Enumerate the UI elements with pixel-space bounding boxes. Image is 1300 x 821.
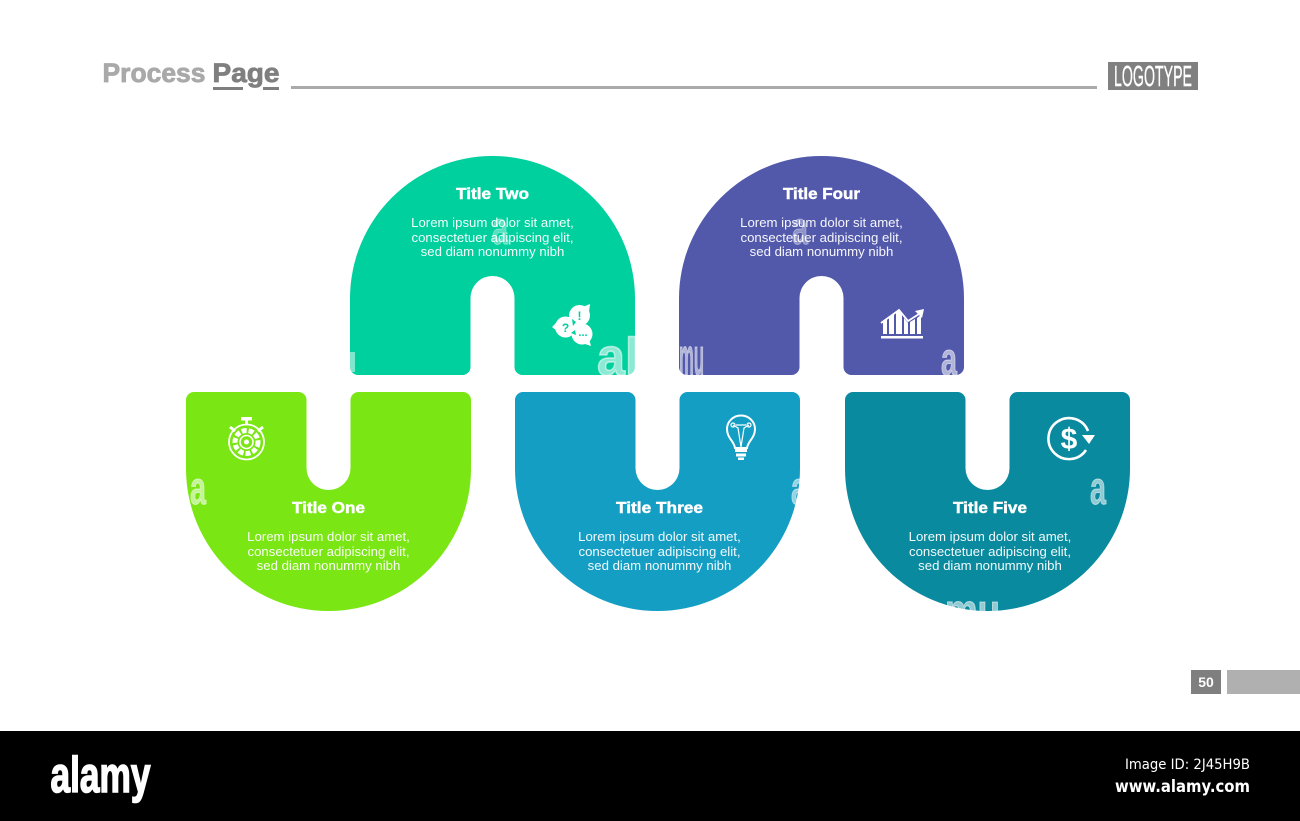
image id: Image ID: 2J45H9B — [1125, 757, 1250, 773]
panel: title five — [845, 392, 1130, 633]
text block: Lorem ipsum dolor sit amet, — [411, 215, 574, 230]
footer url: www.alamy.com — [1115, 777, 1250, 796]
text block: consectetuer adipiscing elit, — [578, 544, 741, 559]
watermark fragments — [945, 462, 1106, 633]
logotype badge — [1108, 61, 1198, 93]
heading: Title Five — [953, 500, 1027, 517]
text block: consectetuer adipiscing elit, — [740, 230, 903, 245]
watermark fragments: mu — [945, 586, 1000, 633]
heading: Title Three — [616, 500, 703, 517]
icon: speech bubbles: ? — [562, 321, 569, 335]
icon: dollar cycle: $ — [1061, 423, 1078, 456]
panel: title two — [350, 156, 639, 387]
icon: speech bubbles: ... — [578, 327, 588, 339]
heading: Title One — [292, 500, 365, 517]
text block: consectetuer adipiscing elit, — [247, 544, 410, 559]
icon: light bulb — [727, 416, 755, 460]
page number: 50 — [1198, 674, 1214, 690]
panel: title four — [679, 156, 964, 387]
text block: Lorem ipsum dolor sit amet, — [909, 529, 1071, 544]
heading: Title Two — [456, 186, 529, 203]
text block: Lorem ipsum dolor sit amet, — [578, 529, 741, 544]
header title: Process — [102, 58, 206, 88]
watermark fragments — [350, 202, 639, 387]
text block: consectetuer adipiscing elit, — [411, 230, 574, 245]
watermark fragments: al — [597, 328, 639, 387]
header title: Page — [212, 58, 280, 88]
heading: Title Four — [783, 186, 860, 203]
text block: sed diam nonummy nibh — [257, 558, 400, 573]
watermark fragment: a — [791, 462, 807, 514]
watermark fragment: a — [190, 462, 206, 514]
header title — [102, 58, 280, 90]
icon: speech bubbles — [552, 304, 592, 346]
logotype badge: LOGOTYPE — [1114, 61, 1192, 93]
icon: dollar cycle — [1048, 418, 1095, 459]
text block: Lorem ipsum dolor sit amet, — [247, 529, 410, 544]
icon: speech bubbles: ! — [578, 309, 582, 323]
watermark fragments — [679, 202, 957, 387]
watermark fragments: a — [792, 202, 808, 254]
watermark fragments: a — [492, 202, 508, 254]
text block: sed diam nonummy nibh — [421, 244, 564, 259]
text block: consectetuer adipiscing elit, — [909, 544, 1071, 559]
text block: sed diam nonummy nibh — [588, 558, 731, 573]
watermark fragments: mu — [679, 328, 704, 387]
watermark fragments: a — [1090, 462, 1106, 514]
icon: stopwatch gear — [229, 417, 264, 460]
panel: title one — [186, 392, 471, 611]
text block: sed diam nonummy nibh — [918, 558, 1062, 573]
text block: sed diam nonummy nibh — [750, 244, 893, 259]
icon: bar chart trend — [881, 309, 924, 338]
footer bar — [0, 731, 1300, 821]
page number — [1191, 670, 1221, 694]
text block: Lorem ipsum dolor sit amet, — [740, 215, 903, 230]
footer logo: alamy — [50, 747, 151, 803]
watermark fragments: a — [941, 333, 957, 385]
panel: title three — [515, 392, 807, 611]
